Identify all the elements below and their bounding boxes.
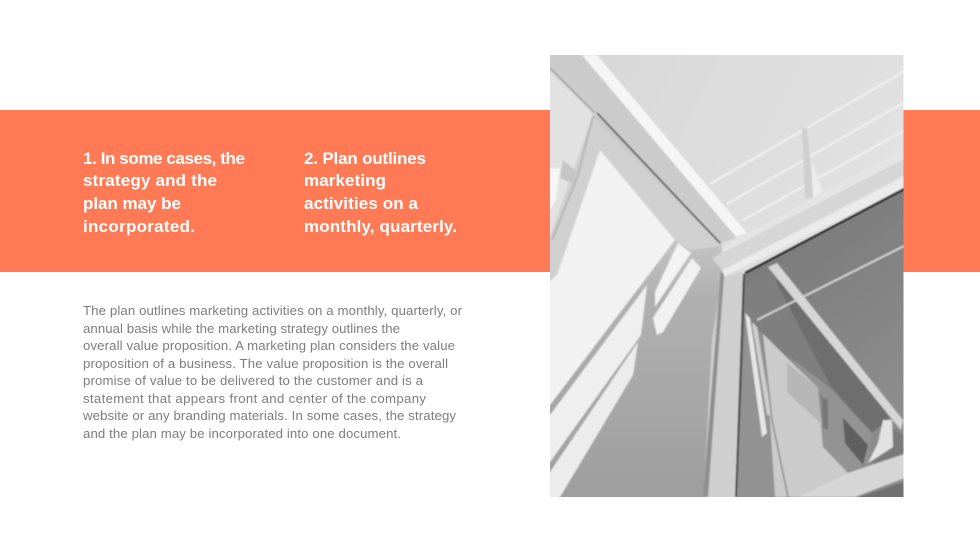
vertical frame: [703, 272, 743, 507]
orange band: [0, 110, 980, 272]
sill: [801, 453, 904, 497]
heading: point 2: 2. Plan outlines: [304, 149, 426, 168]
window header: [712, 156, 910, 270]
heading: point 1: 1. In some cases, the: [83, 149, 245, 168]
body paragraph: promise of value to be delivered to the customer and is a: [83, 373, 424, 388]
left panel: [550, 74, 592, 236]
wall: [540, 113, 722, 507]
glass: [736, 190, 904, 497]
photo: greyscale building corner: [540, 45, 915, 507]
body paragraph: annual basis while the marketing strategy outlines the: [83, 321, 400, 336]
lit interior wall: [762, 333, 848, 497]
body paragraph: proposition of a business. The value proposition is the overall: [83, 356, 448, 371]
railing: [710, 68, 910, 184]
heading: point 1: incorporated.: [83, 217, 195, 236]
heading: point 1: strategy and the: [83, 171, 217, 190]
roof beam: [550, 55, 736, 242]
body paragraph: statement that appears front and center of the company: [83, 391, 426, 406]
body paragraph: and the plan may be incorporated into one document.: [83, 426, 401, 441]
body paragraph: The plan outlines marketing activities on a monthly, quarterly, or: [83, 303, 463, 318]
pipe: [870, 429, 904, 464]
heading: point 1: [83, 149, 245, 236]
dark underside of interior beam: [775, 280, 890, 433]
interior back wall: [790, 358, 869, 436]
diagonal interior beam: [768, 263, 903, 430]
heading: point 2: activities on a: [304, 194, 419, 213]
body paragraph: [82, 303, 463, 441]
thin line: [757, 243, 910, 320]
heading: point 2: marketing: [304, 171, 386, 190]
heading: point 1: plan may be: [83, 194, 181, 213]
heading: point 2: [304, 149, 457, 236]
body paragraph: website or any branding materials. In some cases, the strategy: [82, 408, 456, 423]
interior upper band: [743, 275, 885, 433]
body paragraph: overall value proposition. A marketing plan considers the value: [83, 338, 455, 353]
left interior shade: [738, 322, 772, 490]
heading: point 2: monthly, quarterly.: [304, 217, 457, 236]
sign: [843, 418, 868, 465]
